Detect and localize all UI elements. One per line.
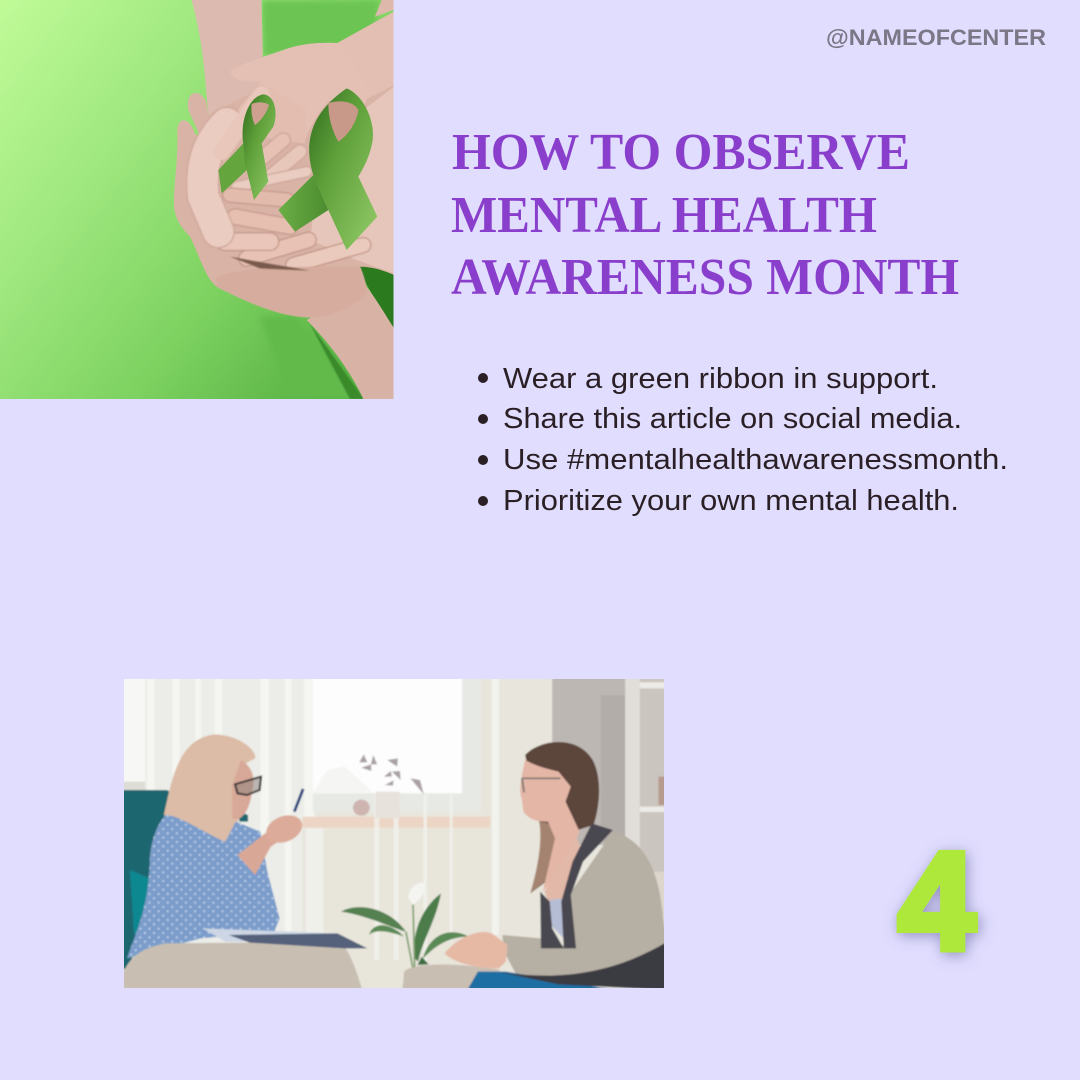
bullet list: Prioritize your own mental health. bbox=[503, 485, 959, 517]
photo: hands holding green ribbons bbox=[0, 0, 394, 399]
title: MENTAL HEALTH bbox=[451, 187, 877, 244]
title: HOW TO OBSERVE bbox=[452, 124, 910, 181]
bullet list: Use #mentalhealthawarenessmonth. bbox=[503, 444, 1008, 476]
page number: 4 bbox=[898, 824, 975, 979]
bullet list bbox=[478, 363, 1008, 517]
client bbox=[402, 742, 667, 990]
left green ribbon bbox=[218, 94, 276, 200]
potted plant bbox=[341, 883, 469, 968]
title: AWARENESS MONTH bbox=[451, 249, 959, 306]
right green ribbon bbox=[278, 88, 377, 250]
bullet list: Wear a green ribbon in support. bbox=[503, 363, 938, 395]
therapist bbox=[120, 734, 367, 990]
photo: therapist and client in session bbox=[116, 672, 671, 993]
handle text: @NAMEOFCENTER bbox=[826, 25, 1046, 50]
title bbox=[451, 124, 959, 306]
bullet list: Share this article on social media. bbox=[503, 403, 962, 435]
